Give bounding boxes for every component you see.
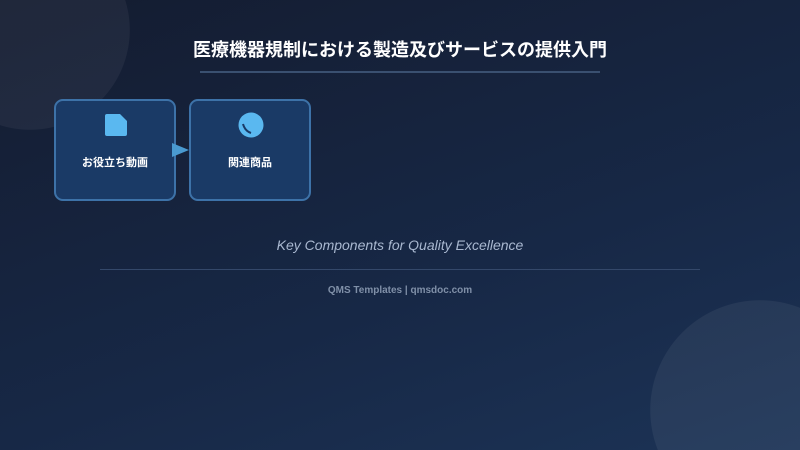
icon: document — [105, 114, 127, 136]
subtitle: Key Components for Quality Excellence — [277, 237, 523, 253]
arrow — [172, 143, 189, 157]
footer: QMS Templates | qmsdoc.com — [328, 285, 472, 296]
title: 医療機器規制における製造及びサービスの提供入門 — [193, 40, 607, 60]
card: videos — [54, 99, 176, 201]
card: videos: お役立ち動画 — [82, 157, 148, 169]
card: related products — [189, 99, 311, 201]
card: related products: 関連商品 — [228, 157, 272, 169]
icon: circle — [238, 112, 264, 138]
